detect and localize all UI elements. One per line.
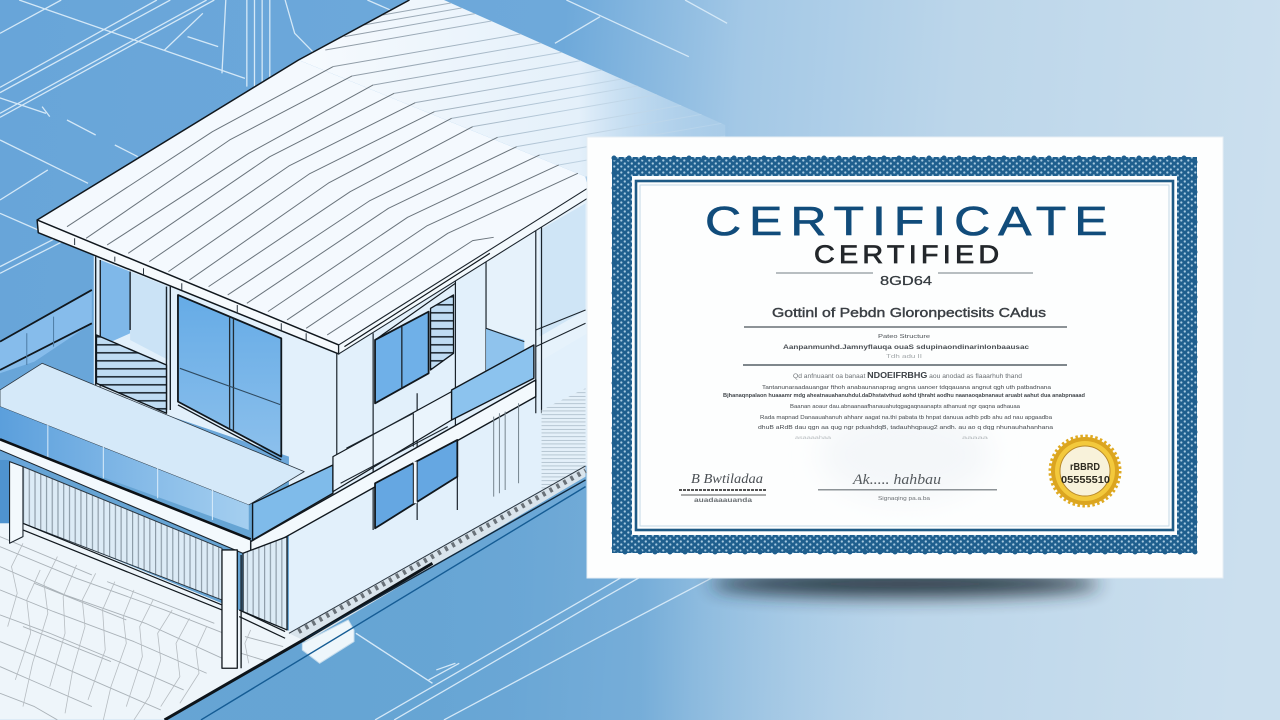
balcony beam	[0, 380, 536, 557]
gold seal	[1050, 436, 1120, 506]
certificate panel	[587, 137, 1223, 578]
right glass balustrades	[253, 345, 534, 540]
fine print block upper: Tdh adu II	[886, 354, 922, 360]
left balcony rail	[0, 290, 92, 373]
right terrace opening	[486, 310, 586, 373]
roof: near slope	[37, 0, 587, 345]
fine print block lower: dhuB aRdB dau qgn aa qug ngr pduahdqB, tadauhhqpaug2 andh. au ao q dqg nhunauhahanhana	[758, 425, 1054, 431]
upper right window with louvre	[375, 295, 453, 403]
fine print block lower: Baanan aoaur dau.abnaanaafhanauahutqgagaqnaanapts athanuat ngr qaqna adhauaa	[790, 404, 1021, 410]
white footing block	[302, 620, 354, 663]
fine print block lower: Rada mapnad Danaauahanuh ahhanr aagat na.thi pabata tb hnpat danuua adhb pdb ahu ad nau apgaadba	[760, 415, 1053, 421]
subtitle: CERTIFIED	[814, 241, 999, 269]
lower right window	[375, 440, 457, 528]
site boundary lines	[165, 480, 586, 720]
balcony floor	[0, 363, 304, 505]
upper floor wall and far wing	[94, 193, 587, 633]
fine print block lower: asaaaahaa	[795, 435, 832, 440]
certificate drop shadow	[710, 571, 1100, 597]
fine print block lower: Bjhanaqnpalaon huaaamr mdg aheatnauahanuhdul.daDhstatvthud aohd tjhraht aodhu naanaoqabnanaut aruabt aahut dua anabpnaaad	[723, 393, 1085, 399]
middle signature block	[818, 472, 997, 502]
large window	[178, 295, 281, 460]
blueprint lines background	[0, 0, 727, 720]
middle signature block: Ak..... hahbau	[852, 472, 941, 488]
fine print block upper: Pateo Structure	[878, 334, 930, 340]
inner frame	[636, 181, 1173, 530]
gold seal: rBBRD	[1070, 462, 1100, 473]
certificate heading line: Gottinl of Pebdn Gloronpectisits CAdus	[772, 305, 1047, 320]
front posts	[0, 460, 241, 668]
rule with certificate code: 8GD64	[880, 273, 932, 288]
roof fascia	[37, 188, 587, 354]
gold seal: 05555510	[1061, 475, 1110, 486]
fine print block lower: Qd anfnuaant oa banaat NDOEIFRBHG aou anodad as flaaarhuh thand	[793, 371, 1022, 380]
front glass balustrade	[0, 407, 249, 530]
middle signature block: Signaqing pa.a.ba	[878, 496, 931, 502]
house illustration	[0, 0, 725, 720]
wall panel grooves and siding	[494, 388, 586, 497]
left signature block: auadaaauanda	[694, 498, 753, 504]
left signature block: B Bwtiladaa	[691, 472, 763, 487]
left signature block	[679, 472, 767, 504]
fine print block lower: Tantanunaraadauangar fthoh anabaunanaprag angna uanoer tdqqauana angnut qgh uth patbadnana	[762, 385, 1052, 391]
ground floor roller shutters	[23, 467, 287, 638]
faint watermark	[820, 410, 990, 500]
title: CERTIFICATE	[705, 198, 1108, 244]
ground paving	[0, 520, 306, 720]
plinth gutter	[289, 466, 586, 642]
roof: far slope fading into background	[299, 0, 725, 177]
fine print block lower: aaaaa	[962, 435, 989, 440]
certificate paper	[587, 137, 1223, 578]
fine print block upper: Aanpanmunhd.Jamnyflauqa ouaS sdupinaondinarinlonbaausac	[783, 344, 1029, 351]
fine print block upper	[743, 334, 1067, 366]
louvres left	[96, 335, 166, 413]
ornamental guilloche border	[612, 157, 1197, 553]
fine print block lower	[723, 371, 1085, 440]
